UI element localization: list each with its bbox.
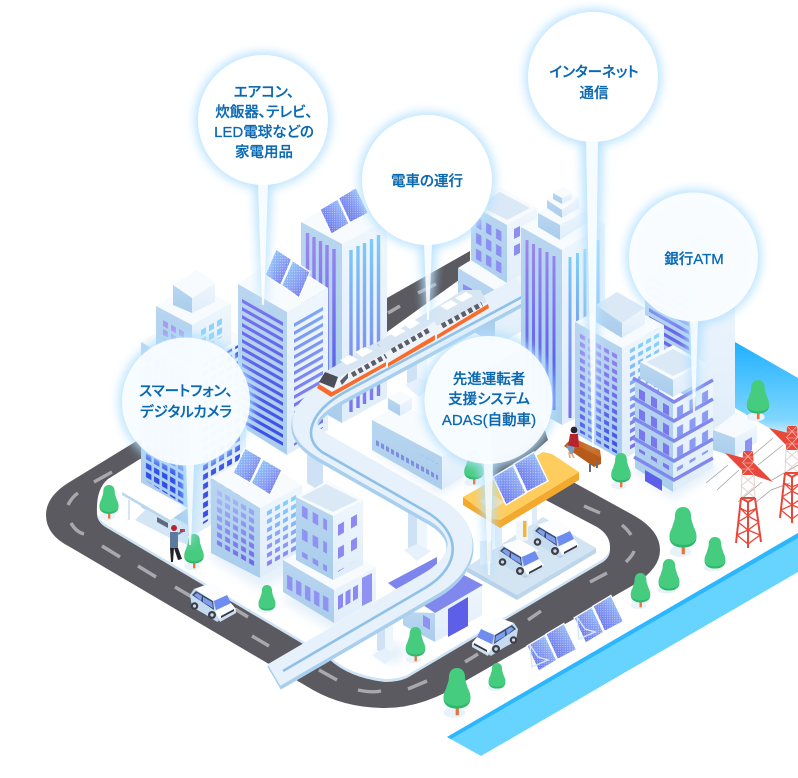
- bubble: bank ATM: [626, 190, 761, 412]
- bench with woman: [564, 427, 601, 472]
- monorail train: [317, 290, 489, 398]
- purple ground patch under track: [388, 557, 437, 589]
- building: back-right: [458, 187, 537, 345]
- base shadows: [205, 435, 720, 665]
- building: two-tier front: [283, 480, 376, 623]
- building: far right striped tower: [645, 232, 735, 445]
- building: dense windows with rooftop solar: [211, 448, 302, 578]
- trees: [99, 380, 769, 718]
- bus stop: [122, 482, 188, 545]
- bubble: ADAS: ADAS(自動車): [442, 412, 536, 429]
- solar panel: far right tower roof: [672, 230, 716, 272]
- ground solar panels: [527, 595, 624, 671]
- transmission tower 1: [725, 451, 773, 548]
- gas station: [467, 506, 596, 600]
- person with camera: [170, 525, 185, 562]
- bubble: home appliances: 炊飯器､テレビ、: [215, 104, 313, 121]
- bubble: internet: インターネット: [549, 64, 639, 81]
- blue-roof building: [403, 573, 483, 642]
- bubble: ADAS: 先進運転者: [453, 371, 525, 388]
- building: dense windows right: [575, 292, 664, 460]
- bubble: bank ATM: 銀行ATM: [664, 251, 724, 268]
- bubble: smartphone and camera: スマートフォン、: [139, 384, 233, 400]
- solar panel: tall building roof: [320, 187, 368, 234]
- bubble: home appliances: [195, 52, 331, 305]
- small building at right: [713, 412, 757, 457]
- building: tall with vertical stripes: [301, 195, 387, 423]
- solar panel: canopy: [493, 452, 548, 505]
- river upper: [735, 342, 798, 445]
- building: tallest with stripes: [521, 187, 605, 425]
- bubble: train operation: 電車の運行: [391, 173, 463, 190]
- monorail pillars: [307, 350, 433, 664]
- bubble: home appliances: LED電球などの: [214, 124, 314, 141]
- bubble: smartphone and camera: デジタルカメラ: [140, 403, 232, 421]
- power lines: [706, 438, 798, 503]
- road lane markings: [68, 472, 634, 692]
- bubble: internet: [525, 9, 661, 447]
- bubble: home appliances: エアコン、: [234, 85, 294, 101]
- bubble: ADAS: [422, 333, 556, 575]
- road: [46, 251, 660, 708]
- bubble: smartphone and camera: [119, 334, 253, 545]
- transmission tower 2: [769, 426, 798, 523]
- building: back-left stepped tower: [141, 270, 246, 537]
- car on road left: [190, 583, 236, 622]
- ground island: [97, 437, 610, 682]
- bubble: home appliances: 家電用品: [235, 144, 293, 161]
- bubble: ADAS: 支援システム: [448, 391, 530, 408]
- upper road lane markings: [388, 284, 436, 313]
- monorail track: [274, 289, 522, 678]
- solar panel: striped building roof: [265, 249, 310, 298]
- gas station canopy: [463, 452, 579, 528]
- bubble: internet: 通信: [580, 85, 608, 102]
- building: tall horizontal striped: [238, 256, 328, 455]
- building: low center: [372, 391, 470, 490]
- building: ledged front-right: [633, 345, 713, 492]
- car on road bottom: [472, 617, 518, 656]
- bubble: train operation: [359, 112, 495, 320]
- river lower: [447, 533, 798, 756]
